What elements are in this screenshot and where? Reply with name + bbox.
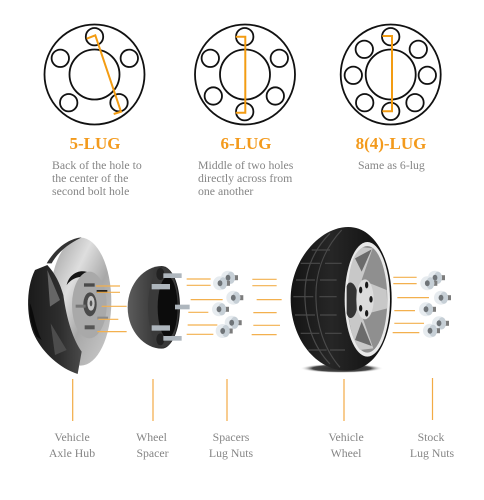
label: Vehicle Wheel: Vehicle bbox=[328, 430, 364, 444]
label: Stock Lug Nuts: Stock bbox=[418, 430, 445, 444]
heading: 6-LUG: 6-LUG bbox=[220, 134, 272, 153]
panel: 5-lug pattern bbox=[44, 24, 144, 198]
panel: 8(4)-lug pattern bbox=[341, 24, 441, 172]
icon: 6-lug bolt circle bbox=[195, 24, 295, 124]
label: Stock Lug Nuts: Lug Nuts bbox=[410, 446, 455, 460]
label: Vehicle Wheel: Wheel bbox=[331, 446, 362, 460]
text: 5-lug description: the center of the bbox=[52, 171, 128, 185]
text: 6-lug description: one another bbox=[198, 184, 253, 198]
leader lines to labels bbox=[73, 378, 432, 421]
heading: 8(4)-LUG: 8(4)-LUG bbox=[356, 134, 426, 153]
icon: 8-lug bolt circle bbox=[341, 24, 441, 124]
label: Vehicle Axle Hub: Axle Hub bbox=[49, 446, 95, 460]
icon: 5-lug bolt circle bbox=[44, 24, 144, 124]
panel: 6-lug pattern bbox=[195, 24, 295, 198]
callout lines: hub studs bbox=[96, 286, 127, 332]
text: 6-lug description: directly across from bbox=[198, 171, 292, 185]
label: Spacers Lug Nuts: Lug Nuts bbox=[209, 446, 254, 460]
text: 5-lug description: Back of the hole to bbox=[52, 158, 142, 172]
label: Wheel Spacer: Spacer bbox=[136, 446, 169, 460]
illustration: vehicle axle hub bbox=[28, 237, 127, 374]
label: Wheel Spacer: Wheel bbox=[136, 430, 168, 444]
wheel rim bbox=[345, 242, 390, 357]
callout lines: wheel to stock nuts bbox=[393, 277, 429, 333]
text: 5-lug description: second bolt hole bbox=[52, 184, 129, 198]
text: 6-lug description: Middle of two holes bbox=[198, 158, 294, 172]
label: Spacers Lug Nuts: Spacers bbox=[213, 430, 250, 444]
illustration: wheel spacer bbox=[128, 266, 190, 349]
text: 8-lug description: Same as 6-lug bbox=[358, 158, 425, 172]
label: Vehicle Axle Hub: Vehicle bbox=[54, 430, 90, 444]
icon: stock lug nuts bbox=[419, 271, 451, 338]
icon: spacer lug nuts bbox=[212, 271, 243, 338]
heading: 5-LUG: 5-LUG bbox=[70, 134, 120, 153]
callout lines: spacer studs to nuts bbox=[187, 279, 282, 335]
illustration: vehicle wheel and tire bbox=[291, 227, 392, 373]
